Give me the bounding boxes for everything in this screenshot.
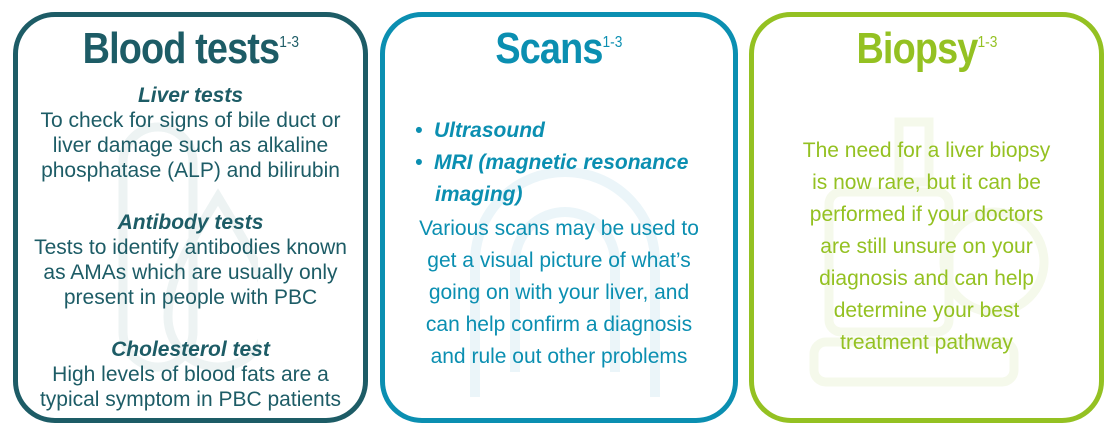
text block: tests: High levels of blood fats are a bbox=[52, 363, 329, 386]
text block: tests: typical symptom in PBC patients bbox=[40, 388, 341, 411]
text block: tests bbox=[34, 84, 347, 411]
panel: biopsy bbox=[749, 12, 1104, 423]
text block: description: Various scans may be used to bbox=[419, 217, 699, 240]
text block: tests: Antibody tests bbox=[118, 211, 263, 234]
panel: scans bbox=[380, 12, 738, 423]
panel: blood tests bbox=[13, 12, 368, 423]
bullet list bbox=[415, 119, 688, 206]
text block: tests: as AMAs which are usually only bbox=[43, 261, 338, 284]
text block: biopsy description bbox=[803, 139, 1050, 354]
title: Scans1-3 bbox=[495, 24, 623, 73]
text block: biopsy description: performed if your doctors bbox=[810, 203, 1043, 226]
text block: tests: Tests to identify antibodies known bbox=[34, 236, 347, 259]
icon: faint MRI scanner bbox=[470, 167, 660, 397]
text block: tests: phosphatase (ALP) and bilirubin bbox=[41, 159, 340, 182]
title: Blood tests1-3 bbox=[82, 24, 299, 73]
text block: description: going on with your liver, and bbox=[429, 281, 689, 304]
text block: biopsy description: determine your best bbox=[834, 299, 1019, 322]
icon: faint microscope bbox=[810, 118, 1048, 386]
text block: biopsy description: diagnosis and can help bbox=[819, 267, 1034, 290]
text block: tests: present in people with PBC bbox=[64, 286, 317, 309]
text block: biopsy description: treatment pathway bbox=[840, 331, 1013, 354]
text block: tests: Cholesterol test bbox=[111, 338, 270, 361]
bullet list: • Ultrasound bbox=[415, 119, 545, 142]
text block: tests: To check for signs of bile duct or bbox=[40, 109, 340, 132]
bullet list: imaging) bbox=[435, 183, 522, 206]
text block: description: get a visual picture of what’s bbox=[427, 249, 691, 272]
title: Biopsy1-3 bbox=[856, 24, 997, 73]
text block: biopsy description: is now rare, but it can be bbox=[812, 171, 1041, 194]
text block: biopsy description: The need for a liver biopsy bbox=[803, 139, 1050, 162]
text block: description: can help confirm a diagnosis bbox=[426, 313, 692, 336]
text block: biopsy description: are still unsure on your bbox=[820, 235, 1033, 258]
icon: faint test tube and drop bbox=[118, 122, 258, 372]
text block: tests: Liver tests bbox=[138, 84, 243, 107]
text block: description bbox=[419, 217, 699, 368]
text block: description: and rule out other problems bbox=[431, 345, 687, 368]
text block: tests: liver damage such as alkaline bbox=[53, 134, 328, 157]
bullet list: • MRI (magnetic resonance bbox=[415, 151, 688, 174]
